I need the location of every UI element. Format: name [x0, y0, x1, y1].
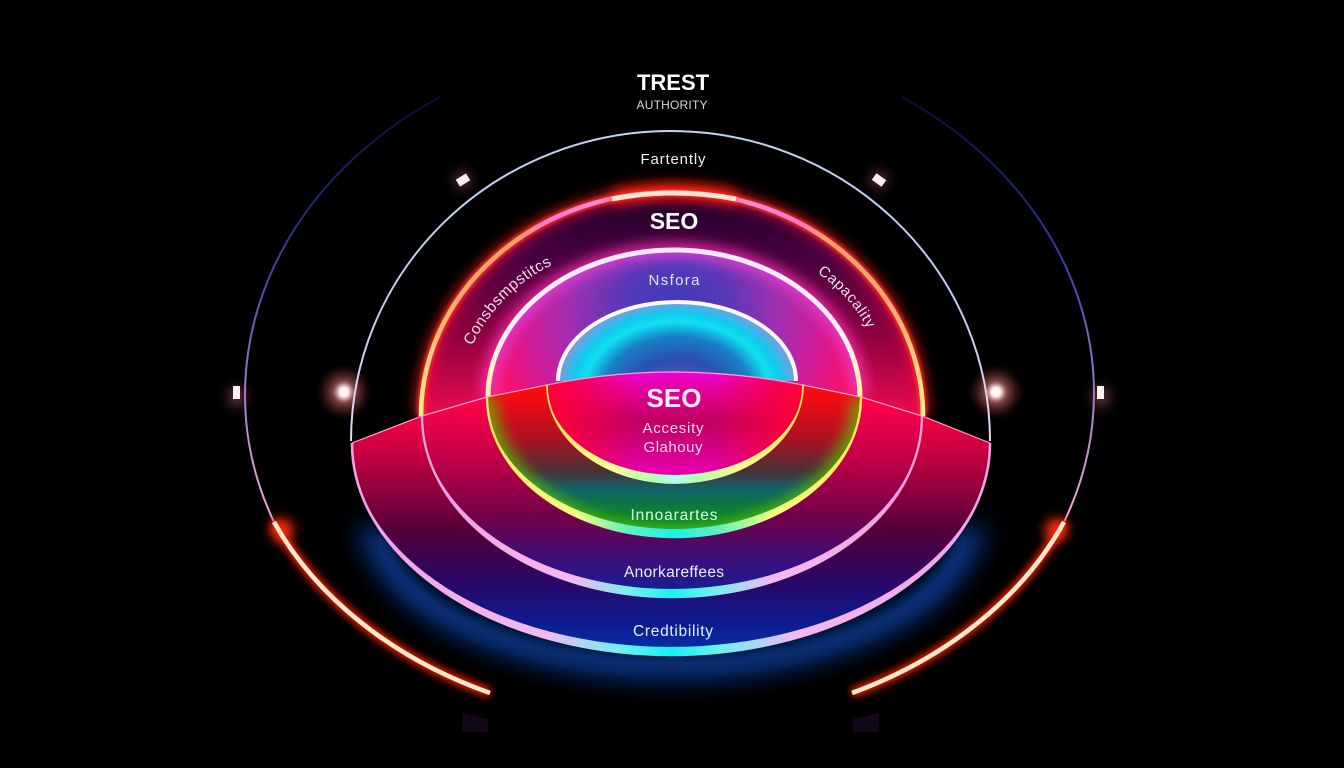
label: seo core: SEO — [647, 383, 701, 413]
marker left — [229, 386, 245, 406]
label: anorkareffees: Anorkareffees — [624, 564, 724, 581]
marker upper left — [452, 169, 474, 191]
left outer arc — [245, 97, 490, 693]
label: seo upper: SEO — [650, 208, 698, 234]
glowing node right — [968, 364, 1024, 420]
marker upper right — [868, 169, 890, 191]
infographic: concentric SEO trust rings — [222, 74, 1116, 732]
band: core dome — [558, 302, 796, 381]
top highlight on ring — [612, 191, 736, 199]
outer ring upper line — [351, 131, 990, 441]
glowing node left — [316, 364, 372, 420]
lower dish: core — [547, 372, 803, 483]
dish top edge — [352, 372, 990, 443]
label: glahouy: Glahouy — [644, 439, 703, 456]
label: accesity: Accesity — [642, 420, 704, 437]
label: credtibility: Credtibility — [633, 623, 713, 640]
lower dish: innoarartes band — [487, 372, 861, 537]
label: capacity curved: Capacality — [820, 266, 874, 326]
label: fartently: Fartently — [640, 151, 706, 168]
lower dish: credibility band — [352, 372, 990, 655]
heading: trest: TREST — [637, 70, 710, 95]
lower dish: anorkareffees band — [422, 372, 922, 597]
blue glow under rings — [368, 525, 976, 670]
marker right — [1093, 386, 1109, 406]
band: inner content ring — [488, 250, 860, 397]
label: consbsmpstitcs curved: Consbsmpstitcs — [464, 258, 551, 344]
band: consistency and capacity ring — [421, 191, 923, 416]
label: nsfora: Nsfora — [648, 272, 700, 289]
faint base marks — [462, 713, 879, 732]
label: innoarartes: Innoarartes — [630, 507, 718, 524]
right outer arc — [852, 97, 1094, 693]
subheading: authority: AUTHORITY — [636, 98, 708, 112]
